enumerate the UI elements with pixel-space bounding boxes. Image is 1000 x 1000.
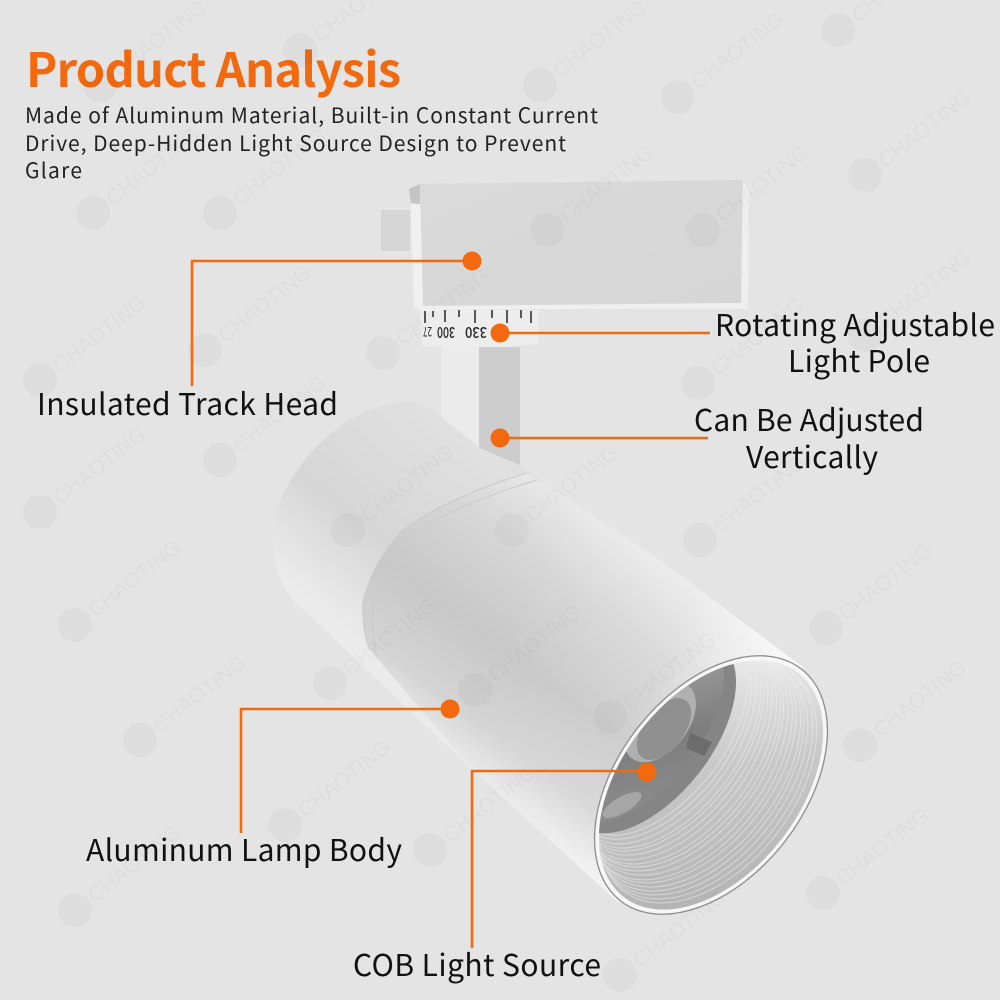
callout: can be adjusted vertically: Can Be Adjusted xyxy=(694,396,924,440)
watermarks: CHAOTING xyxy=(869,656,970,742)
watermarks: CHAOTING xyxy=(707,294,808,380)
callout: rotating adjustable light pole xyxy=(490,301,995,381)
description text: Glare xyxy=(25,155,82,185)
callout: can be adjusted vertically xyxy=(490,396,924,477)
watermarks: CHAOTING xyxy=(687,8,788,94)
watermarks: CHAOTING xyxy=(84,821,185,907)
product: track light xyxy=(284,180,828,915)
watermarks: CHAOTING xyxy=(49,291,150,377)
watermarks: CHAOTING xyxy=(874,246,975,332)
watermarks: CHAOTING xyxy=(439,761,540,847)
watermarks: CHAOTING xyxy=(294,736,395,822)
callout: insulated track head: Insulated Track Head xyxy=(37,380,338,424)
watermarks: CHAOTING xyxy=(835,539,936,625)
description text xyxy=(25,100,598,185)
watermarks: CHAOTING xyxy=(484,601,585,687)
pole xyxy=(441,347,520,470)
rotating dial: 27 xyxy=(423,323,432,342)
watermarks: CHAOTING xyxy=(832,804,933,890)
COB light source xyxy=(599,664,736,834)
watermarks: CHAOTING xyxy=(556,141,657,227)
watermarks: CHAOTING xyxy=(712,141,813,227)
watermarks: CHAOTING xyxy=(84,536,185,622)
watermarks: CHAOTING xyxy=(214,261,315,347)
rotating dial: 300 xyxy=(437,322,455,343)
watermarks: CHAOTING xyxy=(709,451,810,537)
watermarks: CHAOTING xyxy=(392,264,493,350)
callout: COB light source: COB Light Source xyxy=(353,941,601,985)
callout: COB light source xyxy=(353,762,656,985)
watermarks: CHAOTING xyxy=(521,441,622,527)
watermarks: CHAOTING xyxy=(102,124,203,210)
watermarks: CHAOTING xyxy=(357,441,458,527)
lamp body xyxy=(273,402,803,903)
callout: insulated track head xyxy=(37,252,482,424)
watermarks: CHAOTING xyxy=(339,594,440,680)
callout: can be adjusted vertically: Vertically xyxy=(746,433,878,477)
watermarks: CHAOTING xyxy=(229,124,330,210)
callout: aluminum lamp body: Aluminum Lamp Body xyxy=(86,826,402,870)
watermarks: CHAOTING xyxy=(619,628,720,714)
description text: Made of Aluminum Material, Built-in Constant Current xyxy=(25,100,598,130)
watermarks: CHAOTING xyxy=(49,423,150,509)
watermarks: CHAOTING xyxy=(229,371,330,457)
callout: rotating adjustable light pole: Light Pole xyxy=(788,337,930,381)
title: Product Analysis xyxy=(26,32,401,101)
lamp opening and reflector xyxy=(594,655,828,915)
callout: rotating adjustable light pole: Rotating Adjustable xyxy=(715,301,995,345)
watermarks: CHAOTING xyxy=(874,86,975,172)
watermarks: CHAOTING xyxy=(629,886,730,972)
track head xyxy=(380,180,749,310)
rotating dial: 330 xyxy=(465,322,487,343)
description text: Drive, Deep-Hidden Light Source Design to Prevent xyxy=(25,128,566,158)
rotating dial xyxy=(420,310,538,348)
watermarks: CHAOTING xyxy=(149,651,250,737)
callout: aluminum lamp body xyxy=(86,700,460,870)
